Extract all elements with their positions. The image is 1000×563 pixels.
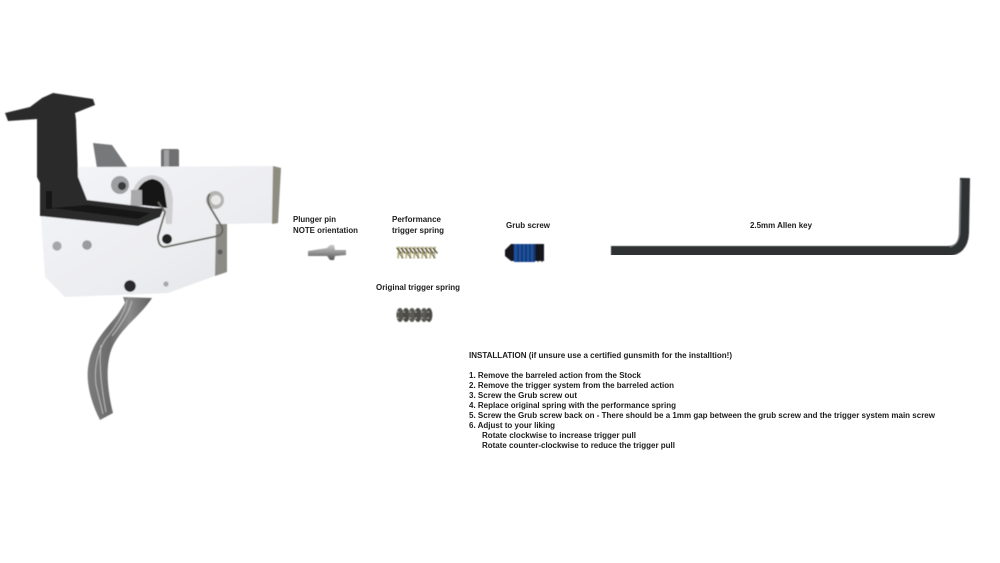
step 5: 5. Screw the Grub screw back on - There should be a 1mm gap between the grub screw and the trigger system main screw — [469, 411, 936, 420]
retaining pin — [206, 191, 224, 209]
label: 2.5mm Allen key: 2.5mm Allen key — [750, 221, 813, 230]
icon: plunger pin — [308, 245, 346, 260]
label: grub screw: Grub screw — [506, 221, 551, 230]
housing right edge — [272, 166, 281, 224]
trigger assembly photo illustration — [5, 93, 281, 420]
trigger highlight — [95, 300, 132, 414]
adjustment hole — [111, 176, 129, 194]
wire spring — [158, 194, 222, 247]
icon: performance spring — [397, 247, 437, 258]
step 6 clockwise note: Rotate clockwise to increase trigger pull — [482, 431, 636, 440]
step 1: 1. Remove the barreled action from the Stock — [469, 371, 642, 380]
instructions heading: INSTALLATION (if unsure use a certified gunsmith for the installtion!) — [469, 351, 732, 360]
icon: original spring — [396, 308, 432, 322]
mounting holes — [52, 234, 223, 292]
step 4: 4. Replace original spring with the performance spring — [469, 401, 676, 410]
label: plunger pin: NOTE orientation — [293, 226, 358, 235]
round cutout in housing — [130, 175, 173, 224]
lever shading — [46, 191, 150, 219]
step 2: 2. Remove the trigger system from the barreled action — [469, 381, 674, 390]
adjustment screw on top — [161, 149, 179, 168]
label: plunger pin — [293, 215, 358, 235]
step 3: 3. Screw the Grub screw out — [469, 391, 577, 400]
installation instructions — [469, 351, 936, 450]
label: plunger pin: Plunger pin — [293, 215, 336, 224]
label: performance spring: Performance — [392, 215, 442, 224]
lower housing edge tab — [215, 224, 227, 276]
sear blade behind the housing — [93, 143, 128, 168]
step 6: 6. Adjust to your liking — [469, 421, 555, 430]
trigger blade — [88, 297, 152, 420]
label: performance spring — [392, 215, 444, 235]
upper housing plate — [41, 166, 281, 297]
label: performance spring: trigger spring — [392, 226, 444, 235]
icon: grub screw — [505, 244, 544, 262]
step 6 counter-clockwise note: Rotate counter-clockwise to reduce the trigger pull — [482, 441, 675, 450]
icon: Allen key — [611, 178, 965, 251]
label: original spring: Original trigger spring — [376, 283, 460, 292]
black safety lever — [5, 93, 164, 226]
